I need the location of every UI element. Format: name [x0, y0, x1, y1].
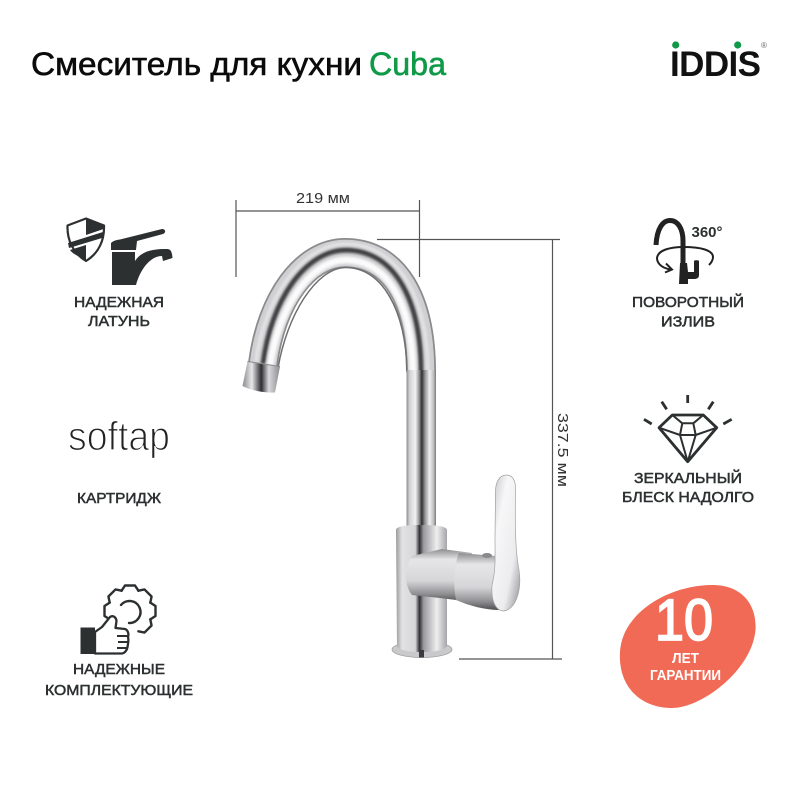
dimension: width 219 mm: [236, 191, 420, 277]
label: reliable brass: НАДЕЖНАЯ: [74, 294, 164, 311]
icon: rotating spout 360: 360°: [692, 225, 723, 241]
logo: softap: softap: [68, 413, 170, 459]
badge: 10 years warranty: 10: [655, 588, 713, 653]
handle lever: [492, 475, 520, 611]
logo: IDDIS: ®: [761, 41, 767, 50]
label: reliable components: [45, 661, 193, 699]
label: reliable components: НАДЕЖНЫЕ: [73, 661, 165, 678]
dimension: height 337.5 mm: 337.5 мм: [554, 413, 570, 487]
riser tube: [406, 370, 436, 530]
badge: 10 years warranty: ГАРАНТИИ: [650, 668, 721, 684]
badge: 10 years warranty: [620, 585, 756, 708]
icon: lever tap: [111, 229, 172, 285]
nozzle: [242, 362, 280, 393]
handle cylinder: [454, 553, 500, 610]
logo: IDDIS: IDDIS: [670, 45, 761, 84]
label: reliable brass: ЛАТУНЬ: [88, 313, 150, 330]
icon: rotating spout 360: [656, 220, 723, 284]
icon: shield: [67, 218, 104, 261]
body column: [396, 525, 447, 652]
label: reliable components: КОМПЛЕКТУЮЩИЕ: [45, 682, 193, 699]
handle screw: [482, 553, 492, 558]
label: swivel spout: [632, 293, 744, 330]
dimension: width 219 mm: 219 мм: [296, 191, 350, 207]
title: Cuba: [369, 46, 446, 82]
base flange: [392, 642, 452, 658]
icon: gear and thumbs up: [80, 586, 156, 654]
label: swivel spout: ИЗЛИВ: [661, 314, 715, 330]
label: mirror shine: ЗЕРКАЛЬНЫЙ: [634, 469, 742, 487]
spout arc: [256, 244, 428, 372]
label: swivel spout: ПОВОРОТНЫЙ: [632, 293, 744, 311]
title: Смеситель для кухни: [31, 46, 362, 82]
icon: diamond with rays: [644, 395, 732, 462]
dimension: height 337.5 mm: [377, 240, 570, 659]
badge: 10 years warranty: ЛЕТ: [672, 651, 699, 667]
label: cartridge: КАРТРИДЖ: [77, 490, 161, 507]
faucet product image: [242, 244, 520, 658]
label: mirror shine: БЛЕСК НАДОЛГО: [622, 489, 754, 506]
junction: [406, 549, 472, 602]
label: mirror shine: [622, 469, 754, 506]
label: reliable brass: [74, 294, 164, 330]
